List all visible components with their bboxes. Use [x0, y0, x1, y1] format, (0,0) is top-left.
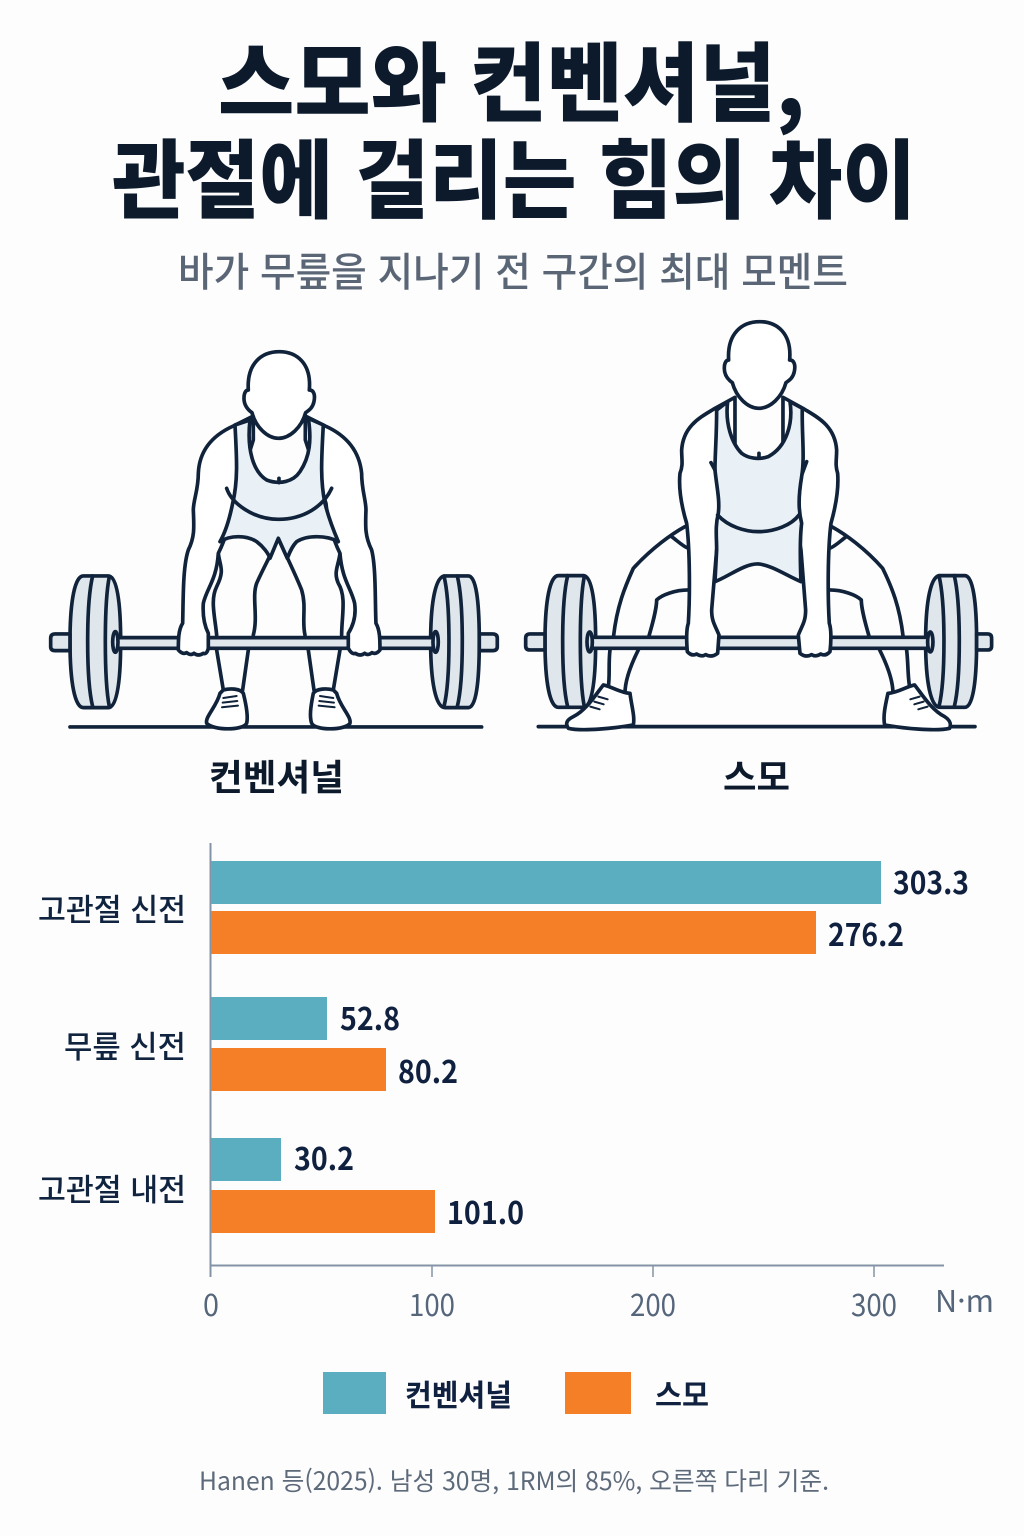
- tank top and shorts: [711, 402, 807, 582]
- category labels: [38, 885, 186, 1210]
- legend: [323, 1371, 709, 1415]
- ground line: [70, 721, 482, 732]
- subtitle: 바가 무릎을 지나기 전 구간의 최대 모멘트: [178, 240, 848, 298]
- category labels: 고관절 내전: [38, 1165, 186, 1210]
- label: conventional: 컨벤셔널: [209, 749, 344, 801]
- illustration: sumo deadlift: [526, 322, 992, 730]
- legs: [608, 527, 910, 693]
- axis tick labels: N·m: [935, 1277, 994, 1321]
- head: [724, 322, 795, 408]
- head: [244, 352, 314, 438]
- value labels: 80.2: [398, 1047, 458, 1092]
- left weight plate: [70, 576, 121, 708]
- bars: knee extension: [211, 997, 386, 1091]
- right weight plate: [431, 576, 479, 708]
- left shoe: [567, 685, 634, 730]
- source note: Hanen 등(2025). 남성 30명, 1RM의 85%, 오른쪽 다리 기준.: [199, 1462, 829, 1498]
- category labels: 무릎 신전: [64, 1022, 186, 1067]
- legend: conventional: [323, 1371, 512, 1415]
- legend: sumo: 스모: [655, 1371, 709, 1415]
- right weight plate: [926, 576, 977, 707]
- value labels: 276.2: [828, 910, 904, 955]
- arms and hands: [680, 397, 838, 656]
- legs: [213, 538, 343, 690]
- right shoe: [310, 689, 350, 729]
- axis tick labels: [203, 1277, 994, 1325]
- left shoe: [206, 689, 247, 729]
- legend: sumo: [565, 1371, 709, 1415]
- label: sumo: 스모: [723, 749, 790, 801]
- value labels: 303.3: [893, 858, 969, 903]
- category labels: 고관절 신전: [38, 885, 186, 930]
- left weight plate: [545, 576, 596, 707]
- arms and hands: [178, 416, 380, 655]
- tank top and shorts: [220, 418, 338, 558]
- bar chart: [38, 843, 994, 1325]
- legend: conventional: 컨벤셔널: [405, 1371, 512, 1415]
- axes: [210, 843, 944, 1277]
- value labels: 101.0: [447, 1188, 524, 1233]
- ground line: [538, 721, 975, 732]
- value labels: 52.8: [340, 994, 400, 1039]
- value labels: [294, 858, 969, 1233]
- value labels: 30.2: [294, 1134, 354, 1179]
- title: [112, 14, 916, 236]
- title: 스모와 컨벤셔널,: [218, 14, 805, 139]
- axis tick labels: 200: [630, 1281, 676, 1325]
- axis tick labels: 300: [851, 1281, 897, 1325]
- barbell: [526, 632, 992, 652]
- illustration: conventional deadlift: [51, 352, 497, 729]
- title: 관절에 걸리는 힘의 차이: [112, 111, 916, 236]
- axis tick labels: 100: [409, 1281, 455, 1325]
- barbell: [51, 632, 497, 652]
- axis tick labels: 0: [203, 1281, 219, 1325]
- bars: hip extension: [211, 861, 881, 954]
- right shoe: [884, 685, 950, 730]
- bars: hip adduction: [211, 1138, 435, 1233]
